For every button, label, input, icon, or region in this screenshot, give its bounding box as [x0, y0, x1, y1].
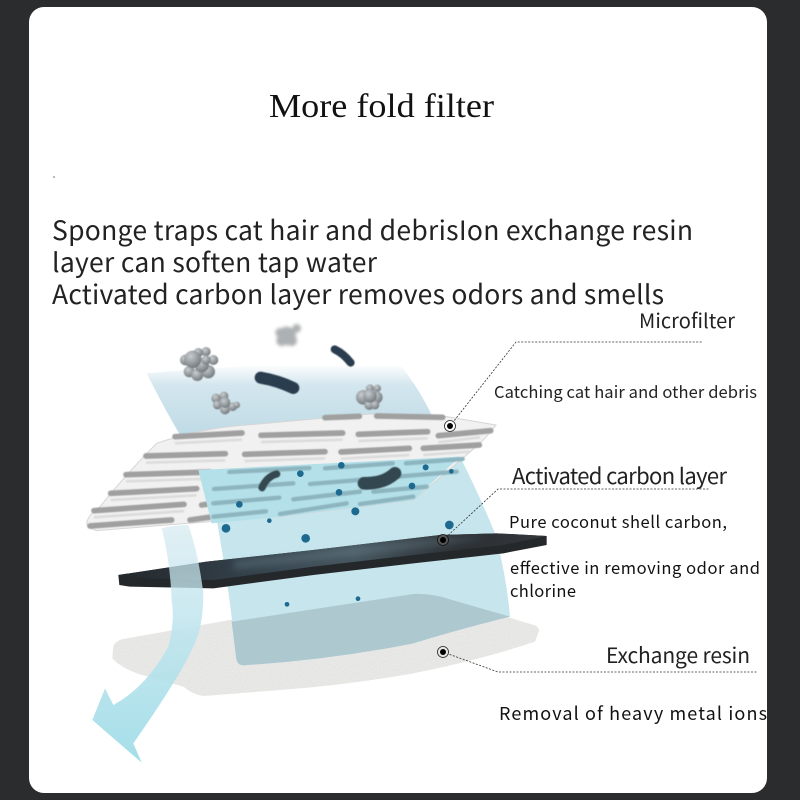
water tint over filter [198, 457, 460, 523]
microfilter layer [87, 414, 496, 531]
particles: cluster large [180, 347, 218, 381]
callout: microfilter [444, 305, 757, 432]
particles: cluster faded [275, 324, 301, 346]
callout: exchange resin: Exchange resin [606, 640, 750, 670]
water beam above the filter [147, 364, 433, 435]
flow arrow [92, 525, 203, 763]
water dots [222, 462, 454, 607]
callout: activated carbon [438, 459, 760, 602]
intro text block: Activated carbon layer removes odors and smells [52, 273, 664, 312]
callout: activated carbon: effective in removing odor and [510, 555, 760, 579]
title: More fold filter [269, 88, 495, 125]
intro text block: layer can soften tap water [52, 241, 378, 280]
particles: cluster small [211, 392, 240, 414]
microfilter ribs [94, 437, 480, 517]
bacteria [261, 349, 395, 488]
callout: exchange resin [438, 640, 767, 726]
callout: activated carbon: Activated carbon layer [512, 459, 727, 491]
particles: cluster right [356, 384, 383, 410]
callout: microfilter: Microfilter [639, 305, 735, 334]
callout: exchange resin: Removal of heavy metal ions [499, 700, 767, 726]
exchange resin layer [112, 594, 539, 696]
callout: activated carbon: chlorine [510, 578, 576, 602]
stray dot [53, 176, 55, 178]
intro text block: Sponge traps cat hair and debrisIon exchange resin [52, 209, 693, 248]
slits seen through water [213, 459, 463, 517]
filter diagram [87, 324, 547, 763]
carbon layer [118, 533, 547, 588]
beam over resin [232, 594, 510, 665]
microfilter slits [90, 416, 491, 526]
callout: microfilter: Catching cat hair and other debris [494, 379, 757, 403]
lower water beam [198, 457, 510, 665]
intro text block [52, 209, 693, 312]
callout: activated carbon: Pure coconut shell carbon, [509, 509, 727, 533]
